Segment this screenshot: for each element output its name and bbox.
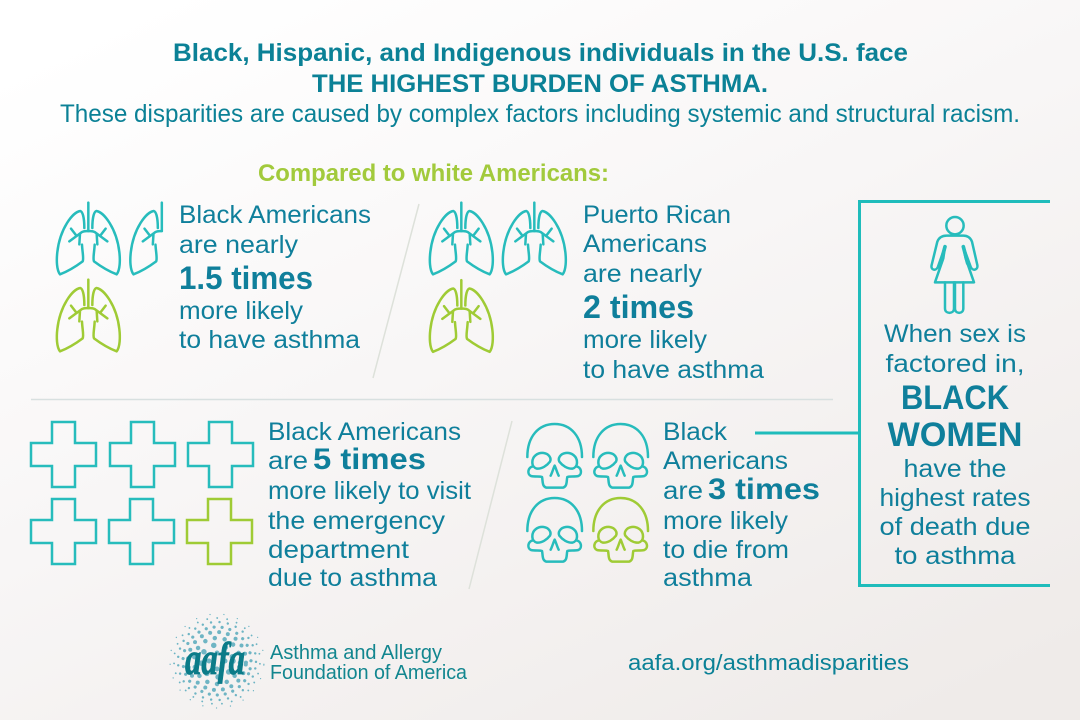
text: 5 times: more likely to visit	[268, 477, 471, 505]
text: 3 times: are	[663, 477, 703, 505]
text: 2 times: to have asthma	[583, 356, 764, 384]
title	[173, 39, 908, 98]
subtitle: These disparities are caused by complex factors including systemic and structural racism.	[60, 100, 1020, 128]
text: 3 times: Black	[663, 418, 728, 446]
text: 1.5 times	[179, 201, 371, 354]
website url: aafa.org/asthmadisparities	[628, 650, 909, 675]
text: highest rates of death: BLACK	[901, 379, 1009, 417]
text: 5 times: are	[268, 447, 308, 475]
logo: AAFA	[158, 602, 468, 720]
text: 5 times: Black Americans	[268, 418, 461, 446]
text: highest rates of death: to asthma	[894, 542, 1016, 570]
text: highest rates of death	[880, 320, 1030, 570]
text: 3 times: Americans	[663, 447, 788, 475]
text: 5 times: 5 times	[313, 443, 426, 476]
callout frame and connector	[755, 202, 1050, 586]
text: highest rates of death: have the	[904, 455, 1006, 483]
heading: compared to white Americans: Compared to white Americans:	[258, 160, 609, 187]
text: 5 times: the emergency	[268, 507, 446, 535]
icon: four skulls	[527, 424, 648, 562]
logo wordmark: Asthma and Allergy	[270, 642, 442, 664]
logo wordmark: Foundation of America	[270, 662, 468, 684]
text: highest rates of death: When sex is	[884, 320, 1026, 348]
panel: Black Americans asthma prevalence	[57, 201, 371, 354]
text: 1.5 times: to have asthma	[179, 326, 360, 354]
panel: Puerto Rican Americans asthma prevalence	[430, 201, 764, 384]
title: Black, Hispanic, and Indigenous individuals in the U.S. face	[173, 39, 908, 67]
panel: death rates	[527, 418, 820, 592]
icon: lungs, one and a half teal plus one green	[57, 203, 162, 351]
text: highest rates of death: WOMEN	[888, 416, 1022, 454]
text: 1.5 times: 1.5 times	[179, 260, 313, 296]
text: 5 times	[268, 418, 471, 592]
text: highest rates of death: of death due	[880, 513, 1030, 541]
logo wordmark	[270, 642, 468, 684]
logo monogram: aafa	[185, 633, 245, 684]
text: 5 times: due to asthma	[268, 564, 437, 592]
text: 3 times: 3 times	[708, 473, 820, 506]
text: 1.5 times: are nearly	[179, 231, 299, 259]
text: 3 times: asthma	[663, 564, 752, 592]
text: 2 times: Americans	[583, 230, 707, 258]
title: THE HIGHEST BURDEN OF ASTHMA.	[312, 70, 768, 98]
logo dot burst	[158, 602, 276, 720]
text: 2 times: 2 times	[583, 289, 694, 325]
panel: emergency department visits	[31, 418, 471, 592]
text: highest rates of death: factored in,	[886, 350, 1024, 378]
text: 3 times	[663, 418, 820, 592]
icon: lungs, two teal plus one green	[430, 203, 566, 352]
text: 5 times: department	[268, 536, 409, 564]
text: 2 times: Puerto Rican	[583, 201, 731, 229]
text: 2 times: are nearly	[583, 260, 703, 288]
text: 3 times: to die from	[663, 536, 789, 564]
callout: Black women	[755, 202, 1050, 586]
icon: six medical crosses	[31, 422, 253, 564]
text: 2 times	[583, 201, 764, 384]
text: highest rates of death: highest rates	[880, 484, 1030, 512]
icon: woman figure	[931, 217, 977, 313]
text: 3 times: more likely	[663, 507, 789, 535]
text: 1.5 times: more likely	[179, 297, 304, 325]
text: 1.5 times: Black Americans	[179, 201, 371, 229]
text: 2 times: more likely	[583, 326, 708, 354]
